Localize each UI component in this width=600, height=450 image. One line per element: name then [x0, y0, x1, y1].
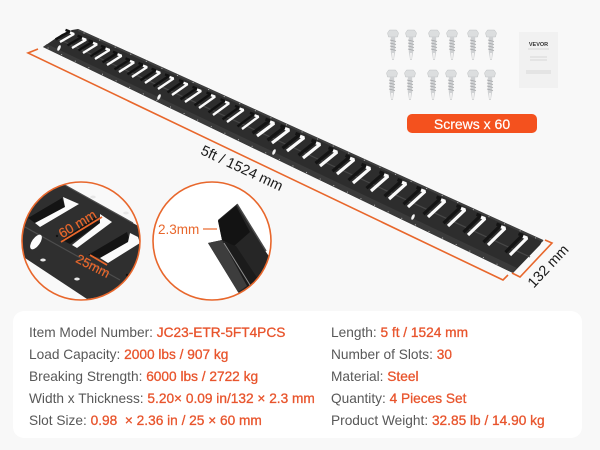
right specs column: Quantity: 4 Pieces Set: [331, 390, 466, 406]
right specs column: Product Weight: 32.85 lb / 14.90 kg: [331, 412, 545, 428]
length label: 5ft / 1524 mm: [198, 143, 285, 195]
right specs column: Length: 5 ft / 1524 mm: [331, 324, 468, 340]
E-track rail: [43, 29, 543, 273]
specifications panel: [13, 311, 582, 438]
left specs column: Width x Thickness: 5.20× 0.09 in/132 × 2.3 mm: [29, 390, 315, 406]
right specs column: Material: Steel: [331, 368, 418, 384]
right specs column: Number of Slots: 30: [331, 346, 452, 362]
left specs column: Load Capacity: 2000 lbs / 907 kg: [29, 346, 228, 362]
screws count badge: Screws x 60: [434, 116, 510, 132]
left specs column: Breaking Strength: 6000 lbs / 2722 kg: [29, 368, 258, 384]
length dimension bracket: [28, 49, 508, 280]
width dimension bracket: [512, 240, 552, 277]
product illustration: [21, 28, 569, 301]
25 mm measure: 25mm: [74, 251, 112, 281]
instruction booklet: VEVOR: [529, 42, 548, 48]
screws count badge: [407, 114, 537, 133]
screws set: [386, 30, 496, 100]
right specs column: [331, 324, 545, 428]
width label: 132 mm: [525, 242, 572, 291]
left specs column: Slot Size: 0.98 × 2.36 in / 25 × 60 mm: [29, 412, 262, 428]
detail circle: thickness: [152, 181, 272, 301]
left specs column: Item Model Number: JC23-ETR-5FT4PCS: [29, 324, 285, 340]
instruction booklet: [519, 32, 558, 88]
60 mm measure: 60 mm: [56, 207, 99, 241]
thickness label: 2.3mm: [158, 222, 199, 237]
detail circle: slot size: [10, 182, 145, 300]
left specs column: [29, 324, 315, 428]
thickness leader: [203, 228, 217, 230]
